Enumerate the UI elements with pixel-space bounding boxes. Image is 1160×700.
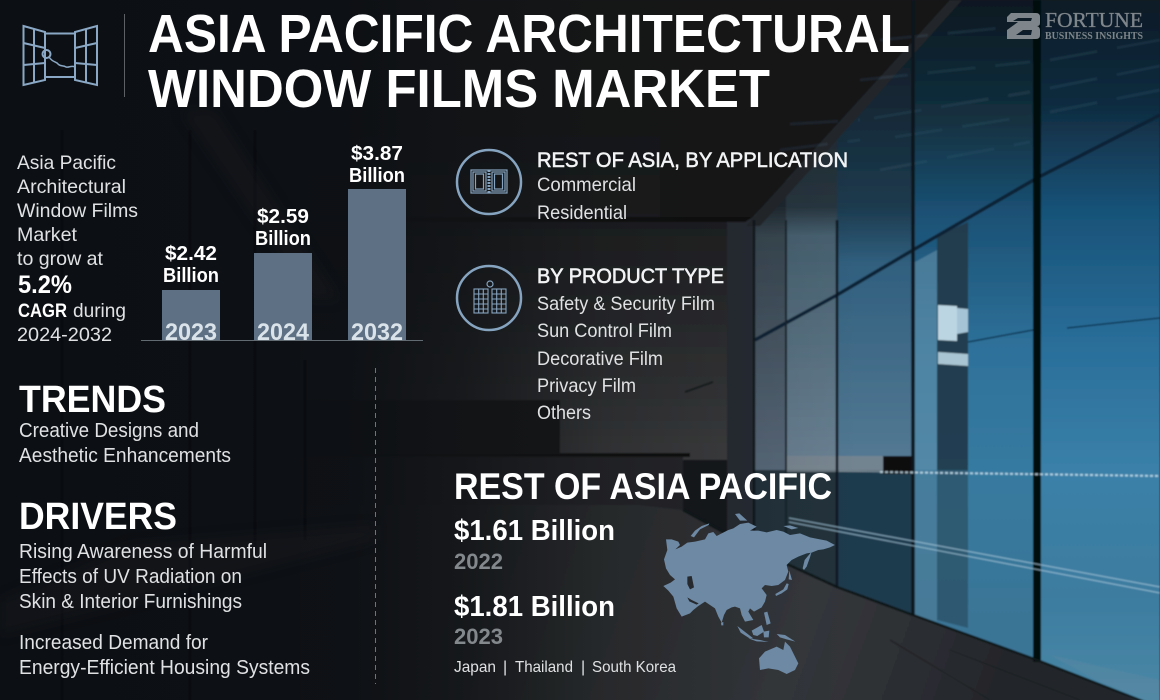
drivers section: Increased Demand for <box>19 632 208 654</box>
drivers section <box>19 496 310 679</box>
bar chart: market size: $2.59 <box>257 206 309 228</box>
regional figures: | <box>503 659 507 676</box>
title: ASIA PACIFIC ARCHITECTURAL <box>148 4 910 64</box>
logo: Fortune Business Insights: BUSINESS INSIGHTS <box>1045 31 1143 42</box>
drivers section: Effects of UV Radiation on <box>19 566 242 588</box>
regional figures: 2023 <box>454 624 503 649</box>
trends section: Creative Designs and <box>19 420 199 442</box>
drivers section: Skin & Interior Furnishings <box>19 591 242 613</box>
CAGR statement: to grow at <box>17 248 104 270</box>
bar chart: market size: 2024 <box>257 319 310 346</box>
CAGR statement: Architectural <box>17 176 126 198</box>
application segment: Commercial <box>537 174 636 196</box>
trends section: Aesthetic Enhancements <box>19 445 231 467</box>
logo: Fortune Business Insights: FORTUNE <box>1045 8 1143 32</box>
product type segment: Safety & Security Film <box>537 293 715 315</box>
title <box>148 4 910 119</box>
drivers section: Energy-Efficient Housing Systems <box>19 657 310 679</box>
product type segment: Sun Control Film <box>537 320 672 342</box>
map: Asia Pacific <box>663 513 835 674</box>
icon: product grid window <box>457 266 521 330</box>
CAGR statement: Market <box>17 224 78 246</box>
product type segment: Decorative Film <box>537 348 663 370</box>
bar chart: market size: $3.87 <box>351 143 403 165</box>
CAGR statement: Asia Pacific <box>17 152 116 174</box>
application segment: Residential <box>537 202 627 224</box>
drivers section: DRIVERS <box>19 496 177 538</box>
trends section: TRENDS <box>19 379 166 421</box>
CAGR statement: during <box>73 300 126 322</box>
CAGR statement: CAGR <box>18 300 67 322</box>
product type segment: BY PRODUCT TYPE <box>537 265 724 288</box>
logo: Fortune Business Insights <box>1007 8 1143 42</box>
regional figures: | <box>581 659 585 676</box>
bar chart: market size: Billion <box>163 265 219 287</box>
regional figures: REST OF ASIA PACIFIC <box>454 466 832 507</box>
CAGR statement: 5.2% <box>18 271 72 299</box>
regional figures: $1.61 Billion <box>454 515 615 547</box>
bar chart: market size: Billion <box>349 165 405 187</box>
regional figures: Japan <box>454 659 496 676</box>
bar chart: market size: Billion <box>255 228 311 250</box>
product type segment: Privacy Film <box>537 375 636 397</box>
CAGR statement <box>17 152 138 346</box>
title divider <box>124 14 125 97</box>
product type segment <box>537 265 724 424</box>
bar chart: market size: 2032 <box>351 319 403 346</box>
bar chart: market size: $2.42 <box>165 243 217 265</box>
application segment <box>537 149 848 224</box>
CAGR statement: 2024-2032 <box>17 324 112 346</box>
regional figures <box>454 466 832 676</box>
regional figures: 2022 <box>454 549 503 574</box>
drivers section: Rising Awareness of Harmful <box>19 541 267 563</box>
icon: application double window <box>457 150 521 214</box>
product type segment: Others <box>537 402 591 424</box>
CAGR statement: Window Films <box>17 200 138 222</box>
bar chart: market size: 2023 <box>165 319 217 346</box>
icon: open window <box>24 26 97 85</box>
regional figures: $1.81 Billion <box>454 591 615 623</box>
application segment: REST OF ASIA, BY APPLICATION <box>537 149 848 172</box>
regional figures: South Korea <box>592 659 676 676</box>
bar chart: market size <box>141 143 423 346</box>
dashed divider <box>374 368 376 684</box>
regional figures: Thailand <box>515 659 573 676</box>
title: WINDOW FILMS MARKET <box>148 59 770 119</box>
trends section <box>19 379 231 467</box>
